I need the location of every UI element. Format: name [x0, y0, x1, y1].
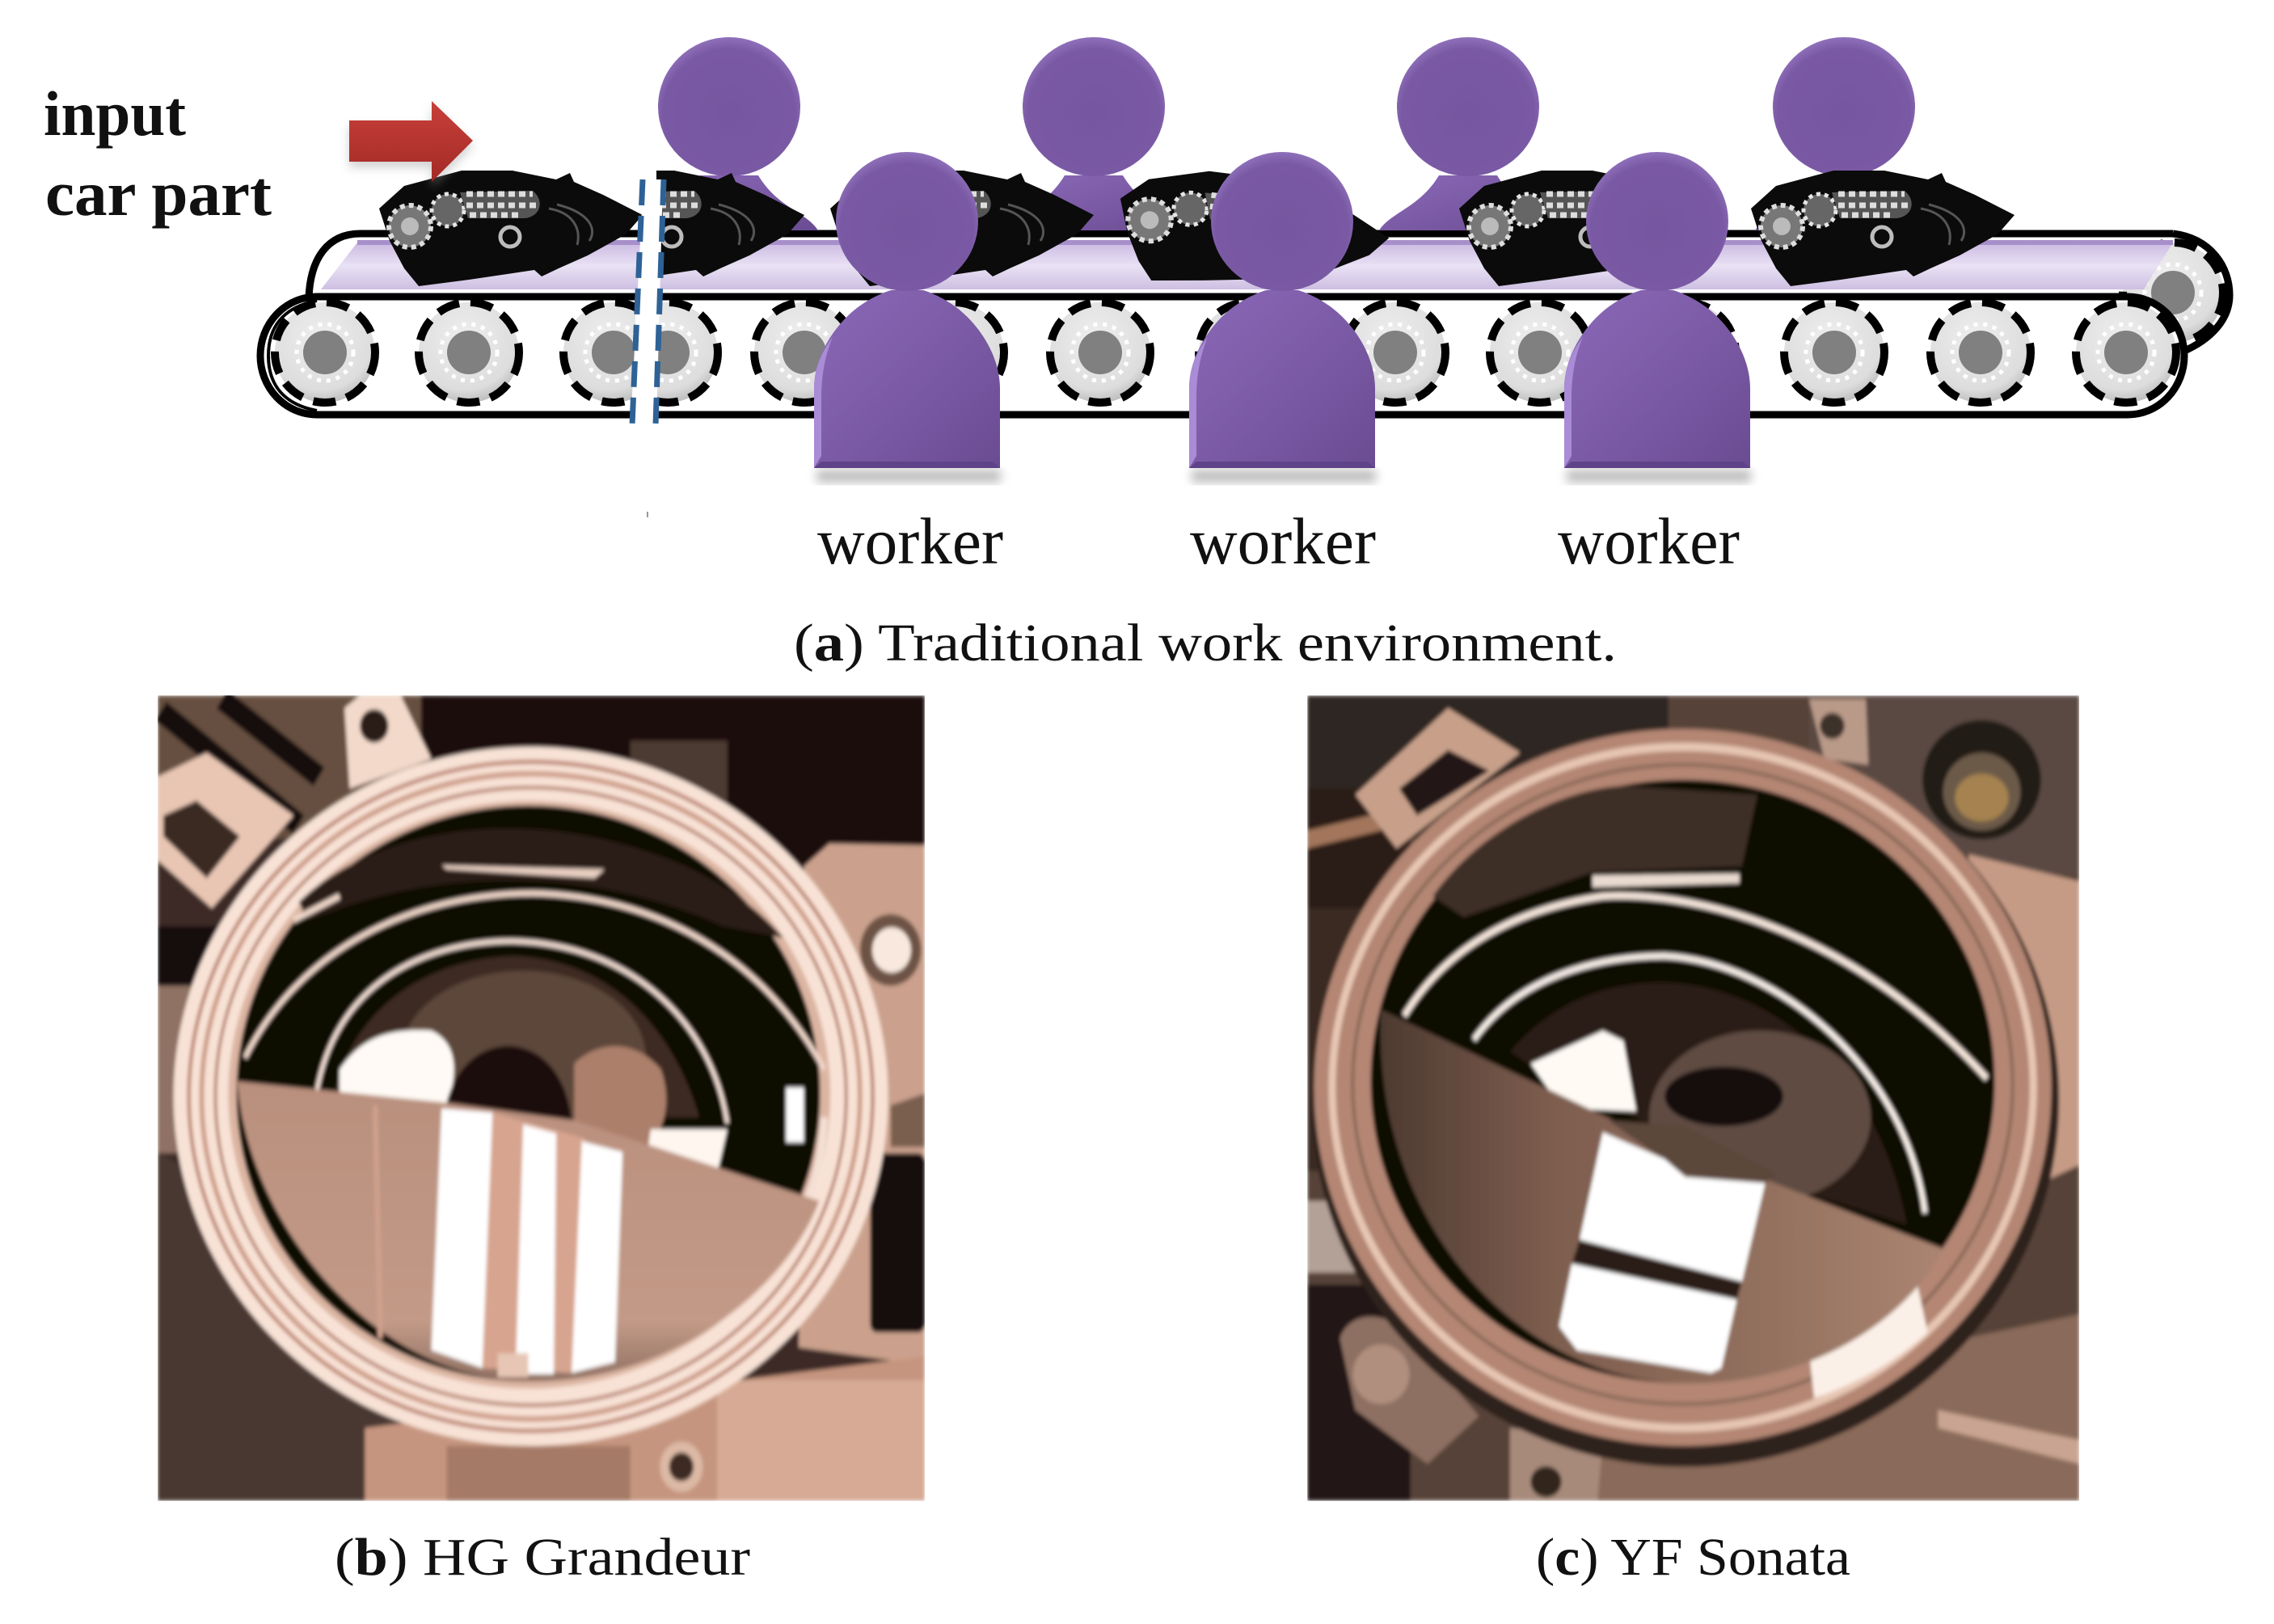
label: input car part: car part — [45, 158, 272, 229]
cut marker: dashed split — [631, 179, 664, 425]
photo b: HG Grandeur headlamp — [158, 695, 925, 1501]
back workers — [640, 37, 1933, 230]
front workers — [814, 152, 1751, 483]
label: input car part — [44, 78, 272, 229]
caption c: (c) YF Sonata — [1536, 1528, 1850, 1587]
label: input car part: input — [44, 78, 186, 149]
worker labels — [817, 504, 1740, 578]
worker labels: worker — [1190, 504, 1376, 578]
worker labels: worker — [817, 504, 1003, 578]
conveyor: rear belt — [309, 234, 2230, 352]
conveyor: front belt with wheels — [260, 297, 2184, 415]
arrow: input direction — [349, 101, 473, 188]
headlamp car parts — [379, 171, 2015, 286]
caption b: (b) HG Grandeur — [335, 1528, 750, 1587]
worker labels: worker — [1558, 504, 1740, 578]
photo c: YF Sonata headlamp — [1307, 695, 2079, 1501]
caption a: (a) Traditional work environment. — [794, 614, 1617, 673]
